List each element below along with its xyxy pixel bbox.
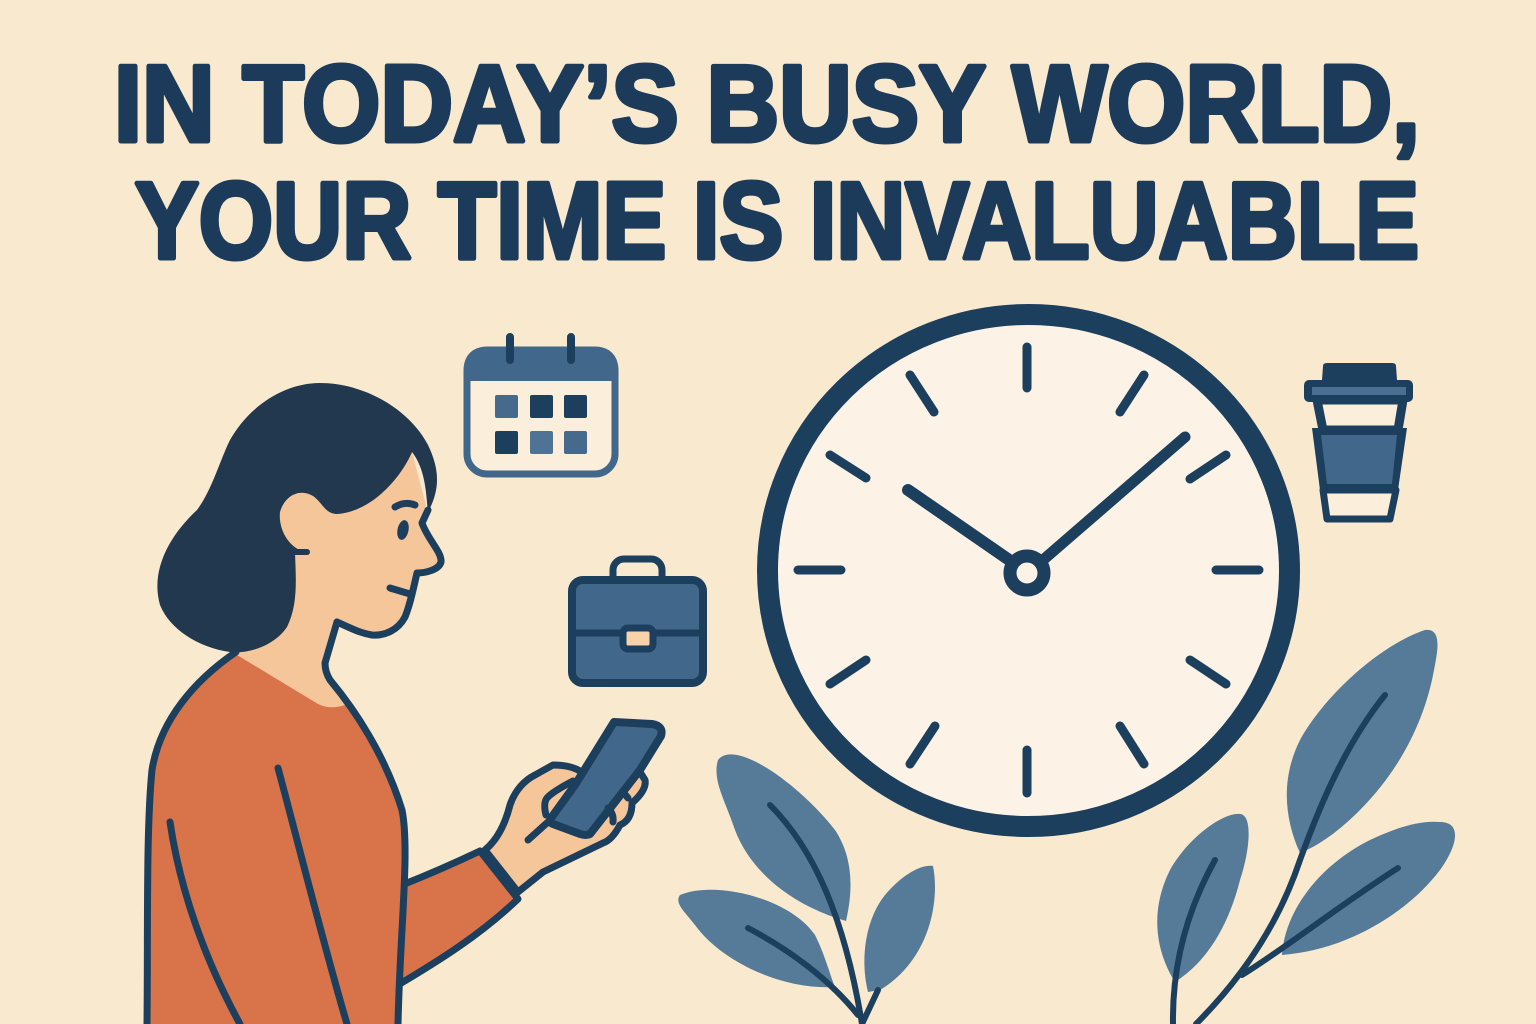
woman with phone bbox=[147, 383, 662, 1024]
icon: calendar bbox=[464, 337, 618, 474]
torso bbox=[147, 640, 406, 1024]
hand bbox=[485, 765, 645, 892]
phone bbox=[550, 722, 662, 835]
eye and brow bbox=[396, 519, 410, 541]
title bbox=[114, 43, 1420, 282]
icon: coffee cup bbox=[1304, 363, 1413, 519]
thumb and finger lines bbox=[528, 781, 628, 840]
plant: left bbox=[678, 754, 935, 1024]
ear lobe line bbox=[295, 549, 307, 555]
face profile bbox=[337, 510, 441, 635]
title: IN TODAY’S BUSY WORLD, bbox=[114, 43, 1420, 165]
sleeve and arm bbox=[398, 851, 518, 985]
icon: briefcase bbox=[572, 559, 703, 683]
body outline bbox=[147, 622, 405, 1024]
hair bbox=[157, 383, 437, 652]
neck and face bbox=[237, 445, 442, 707]
plant: right bbox=[1157, 630, 1455, 1024]
icon: wall clock bbox=[768, 314, 1290, 826]
